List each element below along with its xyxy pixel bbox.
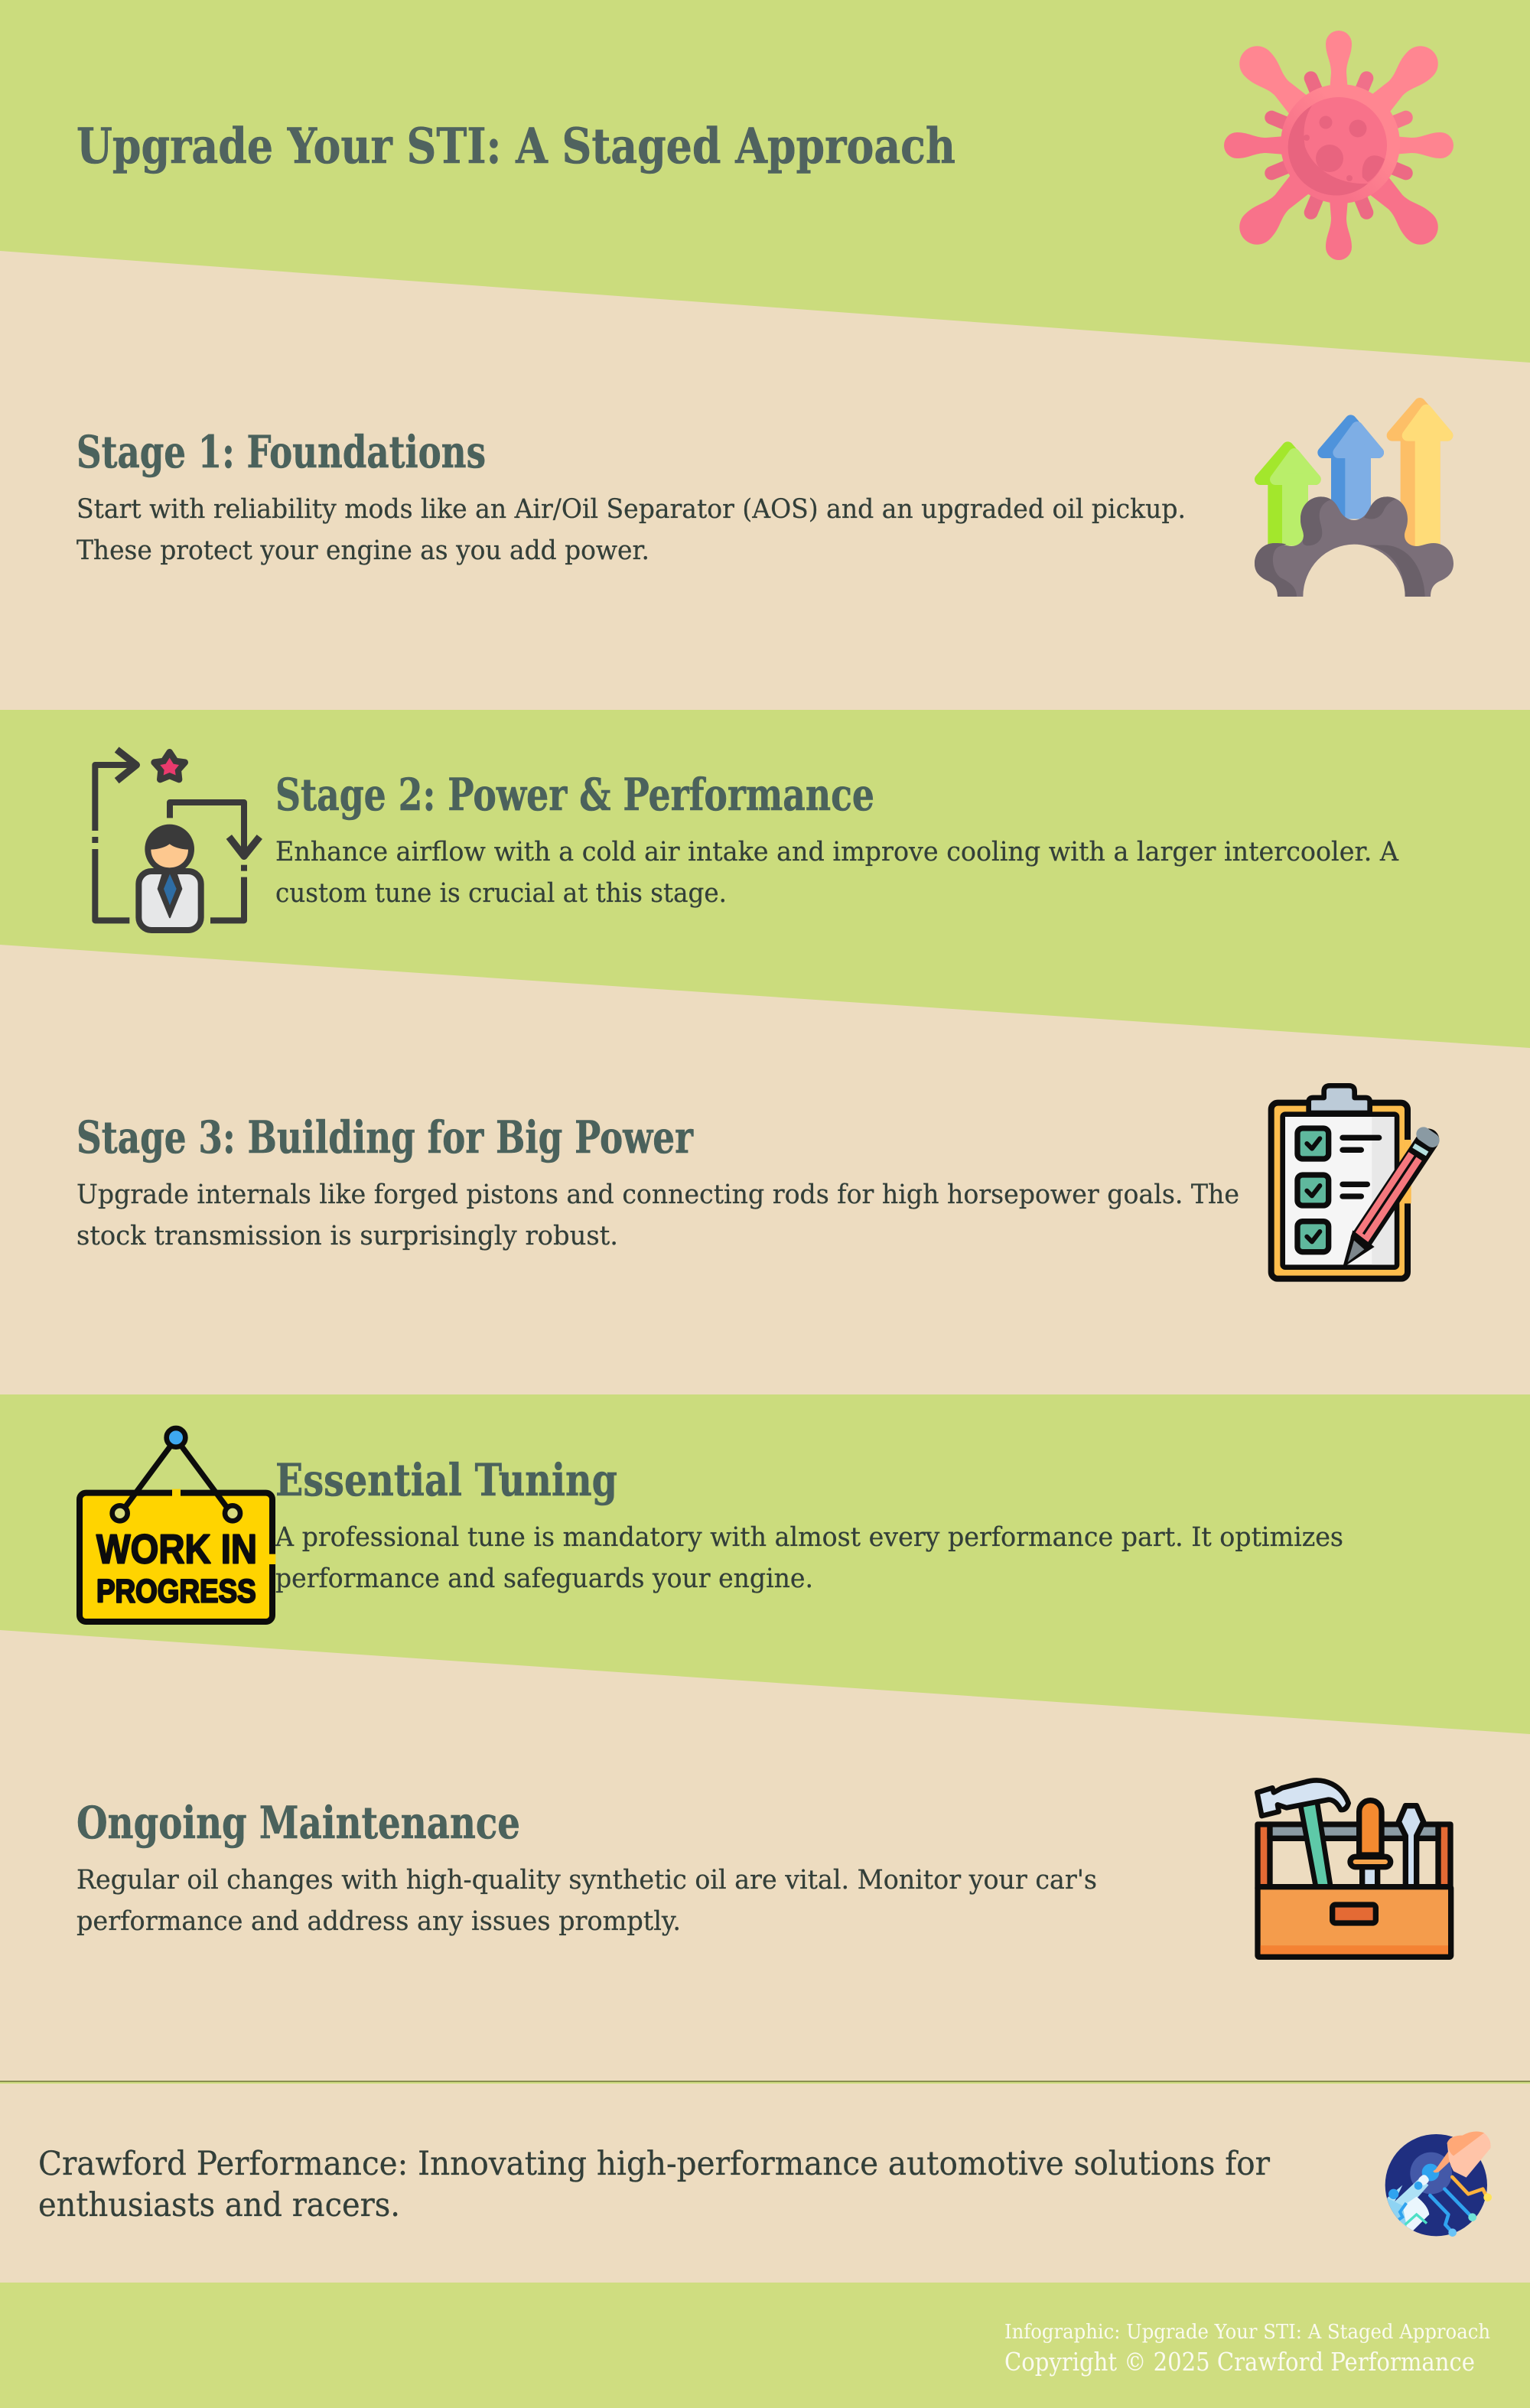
icon: person with arrows xyxy=(92,750,259,930)
gear xyxy=(1255,496,1454,597)
panel: stage 2 band xyxy=(0,710,1530,1048)
text: ongoing maintenance body: Regular oil changes with high-quality synthetic oil are vital. Monitor your car's xyxy=(76,1865,1097,1895)
text: company statement: Crawford Performance: Innovating high-performance automotive solutions for xyxy=(38,2145,1270,2183)
heading: ongoing maintenance: Ongoing Maintenance xyxy=(76,1797,520,1849)
icon: arrows and gear xyxy=(1255,403,1454,597)
panel: header band xyxy=(0,0,1530,363)
pencil xyxy=(1343,1134,1432,1267)
green arrow xyxy=(1260,447,1315,545)
text: stage 1 body: Start with reliability mods like an Air/Oil Separator (AOS) and an upgraded oil pickup. xyxy=(76,494,1186,525)
icon: work in progress sign: WORK IN xyxy=(96,1527,257,1572)
text: stage 1 body: These protect your engine as you add power. xyxy=(76,535,649,566)
text: essential tuning body: performance and safeguards your engine. xyxy=(275,1564,813,1594)
person head xyxy=(145,825,194,874)
text: ongoing maintenance body xyxy=(76,1865,1097,1937)
clip xyxy=(1309,1085,1370,1113)
icon: work in progress sign xyxy=(80,1428,275,1622)
panel: essential tuning band xyxy=(0,1394,1530,1734)
heading: essential tuning: Essential Tuning xyxy=(275,1454,617,1506)
icon: logo circuit hand xyxy=(1385,2131,1492,2237)
box front xyxy=(1258,1887,1451,1957)
text: stage 2 body xyxy=(275,837,1399,909)
screwdriver xyxy=(1350,1801,1391,1888)
text: essential tuning body xyxy=(275,1522,1343,1594)
title: Upgrade Your STI: A Staged Approach xyxy=(76,118,955,175)
panel: footer band xyxy=(0,2283,1530,2408)
blue arrow xyxy=(1323,421,1379,519)
hammer xyxy=(1257,1780,1349,1887)
heading: stage 2: Stage 2: Power & Performance xyxy=(275,769,874,821)
icon: clipboard checklist xyxy=(1271,1085,1432,1279)
text: stage 1 body xyxy=(76,494,1186,566)
yellow arrow xyxy=(1392,403,1447,548)
person body xyxy=(138,871,201,930)
text: stage 3 body: stock transmission is surprisingly robust. xyxy=(76,1221,618,1251)
checklist xyxy=(1297,1128,1379,1252)
pointing human hand xyxy=(1433,2131,1491,2178)
text: stage 3 body xyxy=(76,1180,1239,1251)
star xyxy=(155,752,185,779)
text: footer credits: Copyright © 2025 Crawford Performance xyxy=(1004,2347,1475,2377)
text: stage 2 body: Enhance airflow with a cold air intake and improve cooling with a larger intercooler. A xyxy=(275,837,1399,867)
text: ongoing maintenance body: performance and address any issues promptly. xyxy=(76,1906,681,1937)
text: essential tuning body: A professional tune is mandatory with almost every performance part. It optimizes xyxy=(275,1522,1343,1553)
text: footer credits xyxy=(1004,2321,1490,2377)
flat screwdriver xyxy=(1398,1806,1424,1888)
heading: stage 3: Stage 3: Building for Big Power xyxy=(76,1111,694,1163)
divider line xyxy=(0,2081,1530,2084)
text: stage 3 body: Upgrade internals like forged pistons and connecting rods for high horsepower goals. The xyxy=(76,1180,1239,1210)
robot hand xyxy=(1387,2173,1431,2231)
text: company statement xyxy=(38,2145,1270,2224)
text: footer credits: Infographic: Upgrade Your STI: A Staged Approach xyxy=(1004,2321,1490,2344)
icon: work in progress sign: PROGRESS xyxy=(96,1573,256,1609)
text: company statement: enthusiasts and racers. xyxy=(38,2186,400,2224)
icon: virus xyxy=(1224,31,1454,260)
heading: stage 1: Stage 1: Foundations xyxy=(76,426,486,478)
icon: toolbox xyxy=(1257,1780,1451,1957)
text: stage 2 body: custom tune is crucial at this stage. xyxy=(275,878,727,909)
